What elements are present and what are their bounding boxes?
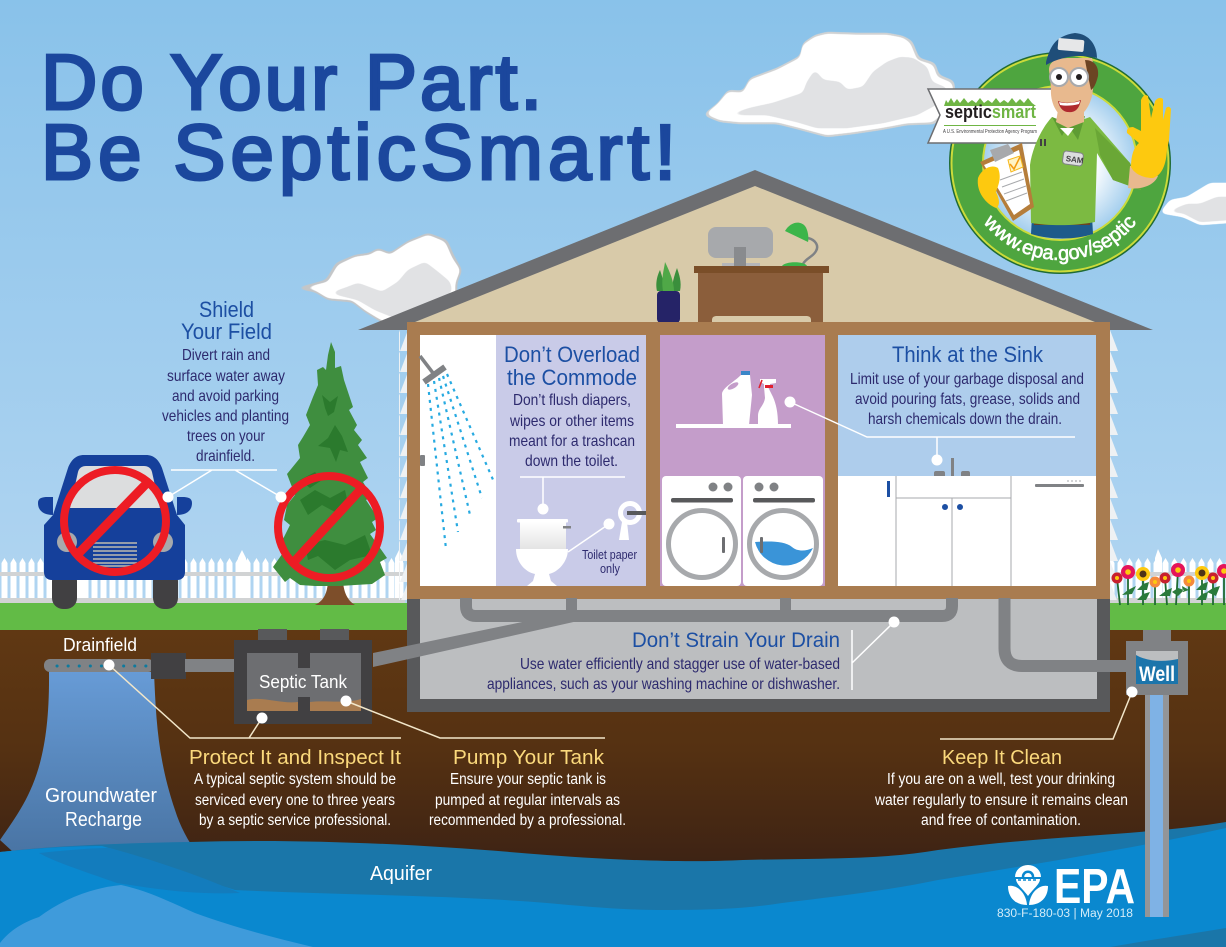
- badge url text: www.epa.gov/septic: [984, 214, 1136, 264]
- text: commode body: down the toilet.: [525, 453, 618, 470]
- pants: [1031, 216, 1093, 238]
- text: protect it and inspect it: serviced every one to three years: [195, 792, 395, 809]
- logo: EPA: [997, 860, 1135, 920]
- text: keep it clean: and free of contamination.: [921, 812, 1081, 829]
- label: groundwater recharge: Recharge: [65, 809, 142, 831]
- heading: commode: the Commode: [507, 365, 637, 390]
- drainfield pipe: [44, 653, 235, 679]
- attic: potted plant: [656, 262, 681, 323]
- text: commode body: wipes or other items: [509, 413, 634, 430]
- text: protect it and inspect it: Protect It and Inspect It: [189, 747, 401, 769]
- icon: toilet paper: [568, 504, 646, 552]
- cloud: right: [1160, 183, 1226, 225]
- text: commode body: meant for a trashcan: [509, 433, 635, 450]
- text: commode body: Don’t flush diapers,: [513, 392, 631, 409]
- label: aquifer: Aquifer: [370, 863, 432, 885]
- text: shield your field: Your Field: [181, 319, 272, 344]
- neck: [1056, 110, 1084, 128]
- septic tank: [234, 629, 372, 724]
- panel: laundry: [660, 335, 825, 586]
- text: keep it clean: If you are on a well, test your drinking: [887, 771, 1115, 788]
- foundation: [407, 596, 1110, 712]
- text: shield your field: surface water away: [167, 368, 285, 385]
- smile: [1058, 100, 1081, 112]
- banner: septicsmart: septicsmart: [945, 102, 1036, 122]
- mascot Sam: [978, 33, 1171, 238]
- text: pump your tank: Pump Your Tank: [453, 747, 605, 769]
- aquifer water: [0, 822, 1226, 947]
- head: [1049, 58, 1094, 119]
- title: Do Your Part.: [41, 38, 542, 126]
- roof: [358, 170, 1153, 330]
- text: shield your field: vehicles and planting: [162, 408, 289, 425]
- icon: EPA flower: [1008, 865, 1048, 905]
- badge: SepticSmart mascot: [926, 33, 1171, 274]
- cloud: top: [703, 32, 955, 137]
- text: commode body: [509, 392, 635, 470]
- heading: commode: Don’t Overload: [504, 342, 640, 367]
- clipboard: [980, 143, 1034, 221]
- cloud: behind roof: [293, 233, 462, 327]
- name tag: SAM: [1065, 154, 1084, 165]
- name tag: [1062, 151, 1084, 166]
- text: protect it and inspect it: by a septic service professional.: [199, 812, 391, 829]
- title: [41, 38, 676, 196]
- icon: toilet: [516, 519, 571, 586]
- pipes under house: [373, 598, 1128, 667]
- text: shield your field: drainfield.: [196, 448, 255, 465]
- sky background: [0, 0, 1226, 610]
- text: don't strain your drain: [487, 629, 840, 693]
- siding teeth: [399, 330, 1118, 600]
- icon: car with prohibition sign: [38, 455, 192, 609]
- text: pump your tank: pumped at regular intervals as: [435, 792, 620, 809]
- heading: think at the sink: Think at the Sink: [892, 342, 1044, 367]
- text: keep it clean: Keep It Clean: [942, 747, 1062, 769]
- text: EPA: EPA: [1054, 860, 1135, 914]
- banner: septicsmart: A U.S. Environmental Protection Agency Program: [943, 129, 1037, 135]
- text: don't strain your drain: Don’t Strain Your Drain: [632, 629, 840, 652]
- label: toilet paper only: Toilet paper: [582, 547, 638, 562]
- text: pump your tank: Ensure your septic tank is: [450, 771, 606, 788]
- attic: desk with monitor and lamp: [694, 223, 829, 323]
- text: shield your field: and avoid parking: [172, 388, 279, 405]
- panel: bathroom: [420, 335, 646, 586]
- callout line: toilet: [520, 477, 625, 514]
- icon: shower: [420, 356, 494, 549]
- glove: [1127, 95, 1171, 178]
- callout lines: protect and pump: [104, 660, 605, 738]
- text: publication number: 830-F-180-03 | May 2018: [997, 908, 1133, 920]
- title: Be SepticSmart!: [41, 108, 676, 196]
- text: shield your field: Divert rain and: [182, 347, 270, 364]
- label: drainfield: Drainfield: [63, 635, 137, 655]
- label: groundwater recharge: Groundwater: [45, 785, 157, 807]
- cap: [1046, 33, 1097, 65]
- label: well: Well: [1139, 663, 1175, 686]
- banner: septicsmart: [928, 89, 1062, 143]
- text: shield your field: trees on your: [187, 428, 266, 445]
- shirt: [1030, 117, 1141, 225]
- text: don't strain your drain: appliances, such as your washing machine or dishwasher.: [487, 676, 840, 693]
- panel: kitchen: [784, 335, 1096, 586]
- label: toilet paper only: only: [600, 561, 620, 576]
- pens: [1041, 139, 1045, 146]
- left glove: [978, 166, 1000, 208]
- soil: [0, 630, 1226, 870]
- text: don't strain your drain: Use water efficiently and stagger use of water-based: [520, 656, 840, 673]
- icon: detergent bottles on shelf: [676, 371, 791, 428]
- callout line: well: [940, 686, 1138, 739]
- text: keep it clean: water regularly to ensure it remains clean: [874, 792, 1128, 809]
- callout lines: car and tree: [162, 470, 286, 502]
- collar: [1052, 116, 1085, 140]
- groundwater recharge plume: [0, 672, 245, 895]
- faucet: [934, 458, 970, 476]
- well: [1126, 630, 1188, 917]
- text: pump your tank: [429, 747, 626, 829]
- text: pump your tank: recommended by a professional.: [429, 812, 626, 829]
- badge ring: [949, 52, 1171, 274]
- flowers: [1112, 563, 1226, 605]
- glasses: [1050, 68, 1088, 86]
- text: protect it and inspect it: [189, 747, 401, 829]
- text: sink body: Limit use of your garbage disposal and: [850, 371, 1084, 388]
- text: protect it and inspect it: A typical septic system should be: [194, 771, 396, 788]
- text: shield your field: Shield: [199, 297, 254, 322]
- text: shield your field: [162, 297, 289, 465]
- washer: [662, 476, 741, 586]
- arm: [1128, 166, 1158, 188]
- dryer with water: [743, 476, 823, 586]
- heading: commode: [504, 342, 640, 390]
- label: septic tank: Septic Tank: [259, 672, 348, 692]
- house frame: [407, 322, 1110, 599]
- text: sink body: harsh chemicals down the drain.: [868, 411, 1062, 428]
- text: keep it clean: [874, 747, 1128, 829]
- fence: [0, 549, 1226, 603]
- label: toilet paper only: [582, 547, 638, 576]
- callout line: drain: [852, 616, 900, 690]
- text: sink body: avoid pouring fats, grease, solids and: [855, 391, 1080, 408]
- text: sink body: [850, 371, 1084, 428]
- icon: tree with prohibition sign: [273, 342, 387, 605]
- label: groundwater recharge: [45, 785, 157, 831]
- callout line: sink: [784, 396, 1075, 466]
- grass: [0, 603, 1226, 631]
